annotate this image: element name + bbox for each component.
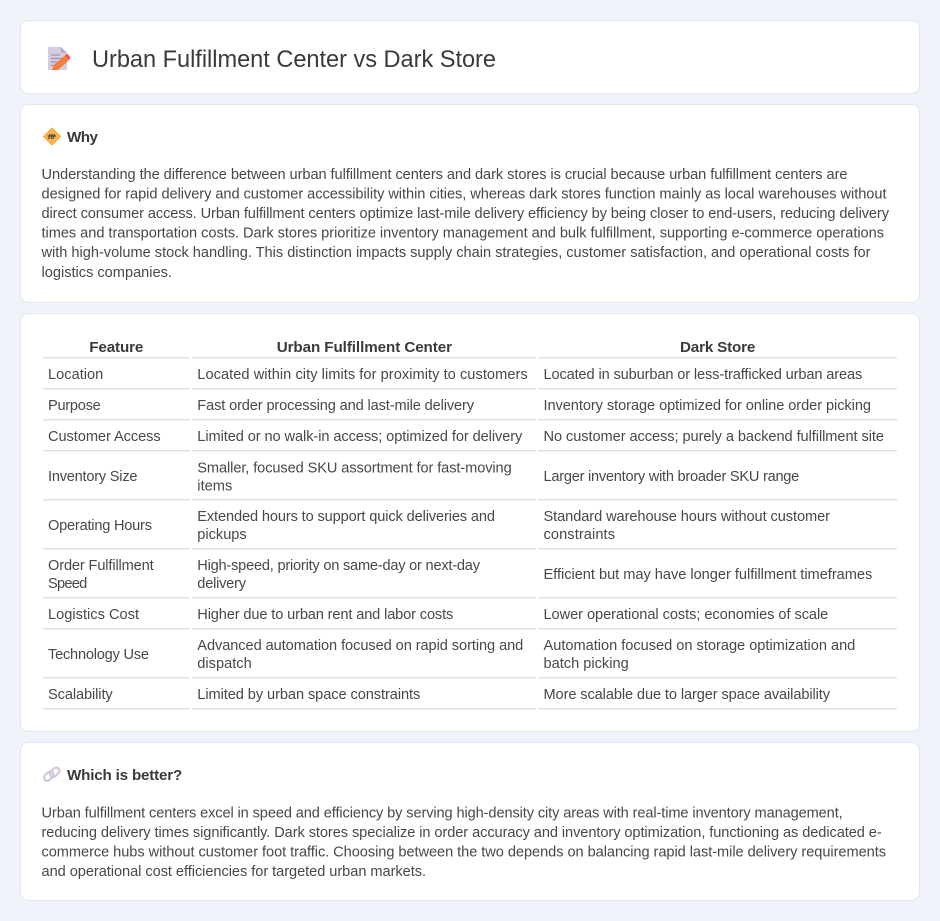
panel: which is better xyxy=(20,742,920,900)
row: technology use: Automation focused on storage optimization and xyxy=(544,638,855,654)
row: operating hours: pickups xyxy=(197,527,247,543)
row: operating hours: Extended hours to support quick deliveries and xyxy=(197,509,495,525)
row: technology use: dispatch xyxy=(197,656,252,672)
row: inventory size: Smaller, focused SKU assortment for fast-moving xyxy=(197,461,512,477)
row: location: Located in suburban or less-trafficked urban areas xyxy=(544,367,862,383)
text: why paragraph: times and transportation costs. Dark stores prioritize inventory management and bulk fulfillment, supporting e-commerce operations xyxy=(42,226,884,242)
row: logistics cost: Higher due to urban rent and labor costs xyxy=(197,607,453,623)
row: customer access: Limited or no walk-in access; optimized for delivery xyxy=(197,429,523,445)
table header: Urban Fulfillment Center xyxy=(277,339,452,356)
row: customer access: Customer Access xyxy=(48,429,161,445)
panel: title card xyxy=(20,20,920,94)
heading: which is better: Which is better? xyxy=(67,767,182,784)
row: order fulfillment speed: Order Fulfillment xyxy=(48,558,154,574)
icon: memo with pencil xyxy=(48,47,70,70)
row: purpose: Purpose xyxy=(48,398,101,414)
panel: why xyxy=(20,104,920,302)
text: why paragraph: direct consumer access. Urban fulfillment centers optimize last-mile delivery efficiency by being closer to end-users, reducing delivery xyxy=(42,206,890,222)
text: which paragraph: Urban fulfillment centers excel in speed and efficiency by serving high-density city areas with real-time inventory management, xyxy=(42,805,843,821)
text: which paragraph: commerce hubs without customer foot traffic. Choosing between the two depends on balancing rapid last-mile delivery requirements xyxy=(42,844,886,860)
row: order fulfillment speed: High-speed, priority on same-day or next-day xyxy=(197,558,481,574)
row: scalability: Limited by urban space constraints xyxy=(197,687,420,703)
row: order fulfillment speed: delivery xyxy=(197,576,247,592)
heading: why: Why xyxy=(67,129,99,146)
table header: Feature xyxy=(89,339,143,356)
row: scalability: More scalable due to larger space availability xyxy=(544,687,831,703)
row: operating hours: Standard warehouse hours without customer xyxy=(544,509,830,525)
row: location: Located within city limits for proximity to customers xyxy=(197,367,528,383)
row: purpose xyxy=(48,398,871,414)
panel: comparison table xyxy=(20,314,920,732)
row: inventory size xyxy=(48,461,799,494)
row: logistics cost xyxy=(48,607,828,623)
row: operating hours: constraints xyxy=(544,527,615,543)
row: logistics cost: Lower operational costs; economies of scale xyxy=(544,607,828,623)
row: inventory size: Larger inventory with broader SKU range xyxy=(544,469,799,485)
row: scalability xyxy=(48,687,831,703)
row: logistics cost: Logistics Cost xyxy=(48,607,139,623)
table header: Dark Store xyxy=(680,339,755,356)
icon: orange diamond sign xyxy=(44,128,60,145)
row: order fulfillment speed xyxy=(48,558,872,592)
row: location: Location xyxy=(48,367,103,383)
row: inventory size: Inventory Size xyxy=(48,469,138,485)
row: order fulfillment speed: Efficient but may have longer fulfillment timeframes xyxy=(544,567,872,583)
text: which paragraph: and operational cost efficiencies for targeted urban markets. xyxy=(42,864,426,880)
text: why paragraph: designed for rapid delivery and customer accessibility within cities, whereas dark stores function mainly as local warehouses without xyxy=(42,186,886,202)
text: why paragraph xyxy=(40,167,890,281)
title: Urban Fulfillment Center vs Dark Store xyxy=(92,47,496,73)
row: technology use: batch picking xyxy=(544,656,629,672)
row: purpose: Inventory storage optimized for online order picking xyxy=(544,398,871,414)
row: location xyxy=(48,367,862,383)
text: why paragraph: logistics companies. xyxy=(42,265,172,281)
row: operating hours: Operating Hours xyxy=(48,518,152,534)
table header xyxy=(89,339,755,356)
icon: chain link xyxy=(43,766,61,782)
text: which paragraph xyxy=(42,805,886,880)
row: inventory size: items xyxy=(197,478,232,494)
row: order fulfillment speed: Speed xyxy=(48,576,87,592)
text: why paragraph: Understanding the difference between urban fulfillment centers and dark stores is crucial because urban fulfillment centers are xyxy=(42,167,848,183)
text: which paragraph: reducing delivery times significantly. Dark stores specialize in order accuracy and inventory optimization, functioning as dedicated e- xyxy=(42,825,882,841)
row: technology use: Technology Use xyxy=(48,647,149,663)
row: technology use: Advanced automation focused on rapid sorting and xyxy=(197,638,523,654)
row: purpose: Fast order processing and last-mile delivery xyxy=(197,398,475,414)
row: technology use xyxy=(48,638,855,672)
row: customer access: No customer access; purely a backend fulfillment site xyxy=(544,429,884,445)
row: operating hours xyxy=(48,509,830,543)
row: scalability: Scalability xyxy=(48,687,113,703)
row: customer access xyxy=(48,429,884,445)
text: why paragraph: with high-volume stock handling. This distinction impacts supply chain strategies, customer satisfaction, and operational costs for xyxy=(40,245,871,261)
